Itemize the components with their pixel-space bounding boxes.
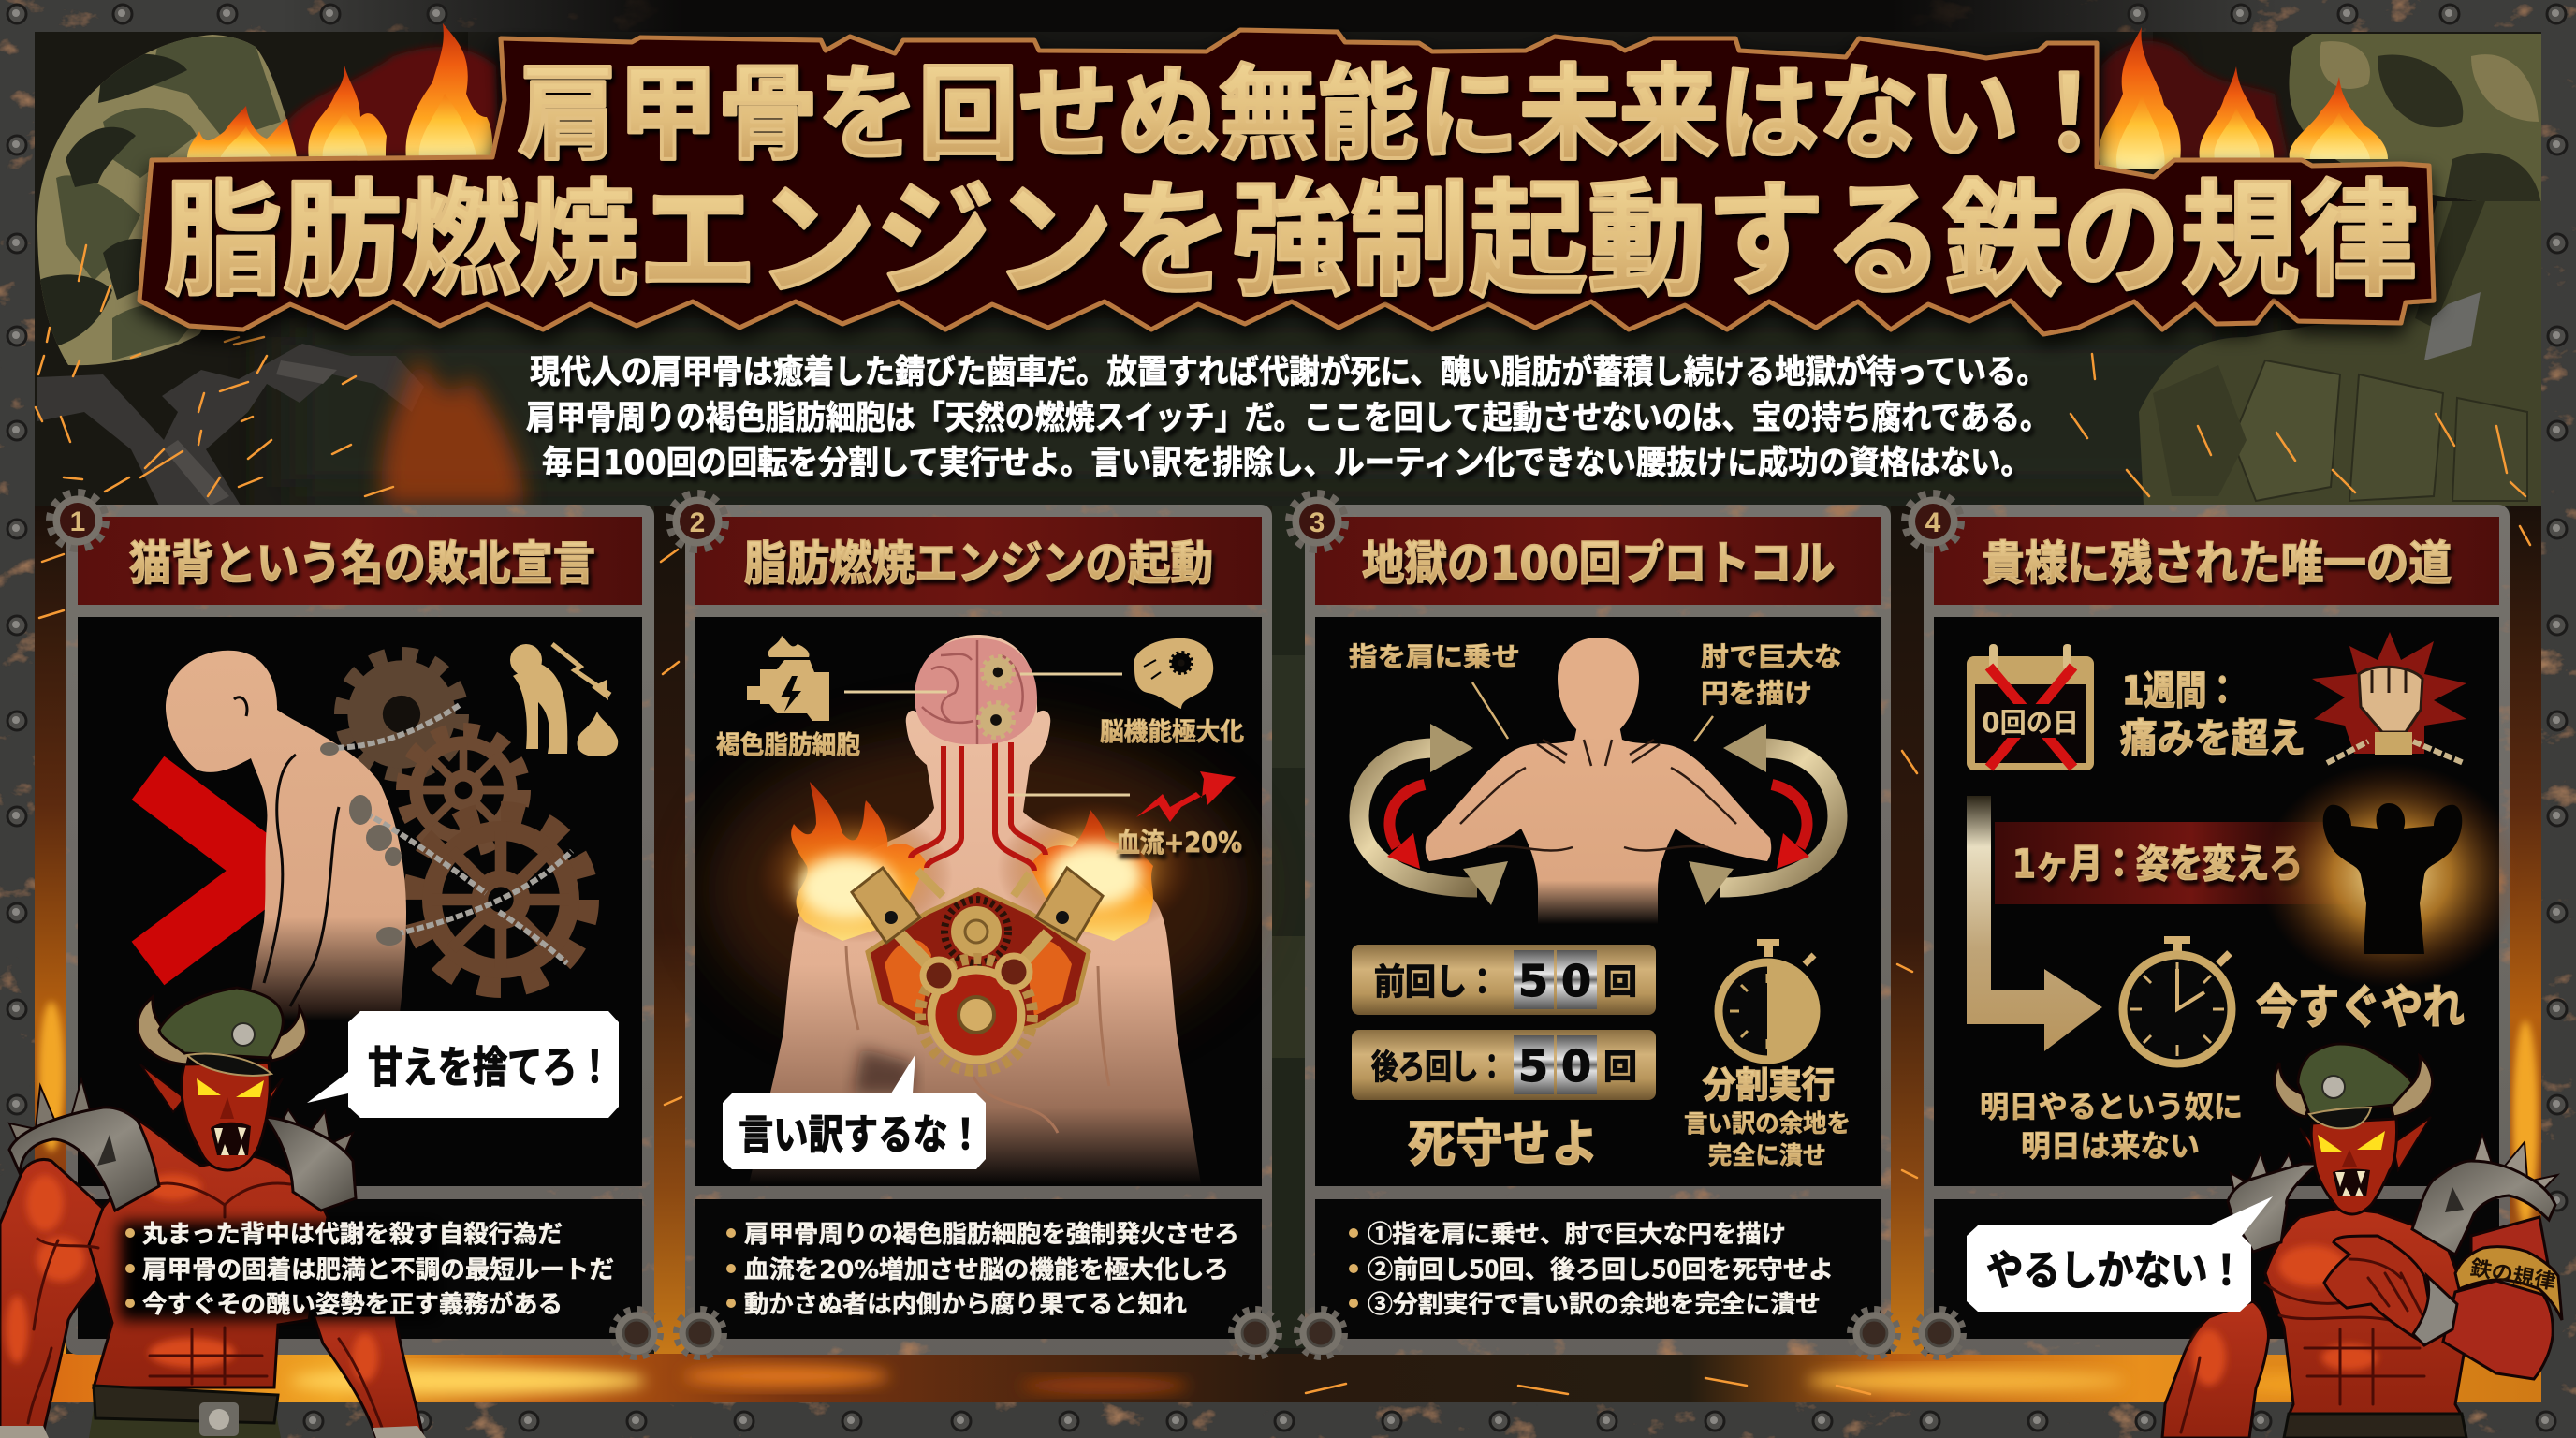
torso bbox=[89, 1116, 328, 1387]
panel 2 bullets: 肩甲骨周りの褐色脂肪細胞を強制発火させろ bbox=[744, 1220, 1239, 1248]
panel 4 image area bbox=[1934, 617, 2499, 1186]
panel 2 bullets bbox=[726, 1220, 1239, 1318]
title line 2: 脂肪燃焼エンジンを強制起動する鉄の規律 bbox=[164, 171, 2418, 311]
label: hold to the death: 死守せよ bbox=[1408, 1116, 1599, 1172]
label: split execution: 言い訳の余地を bbox=[1684, 1109, 1851, 1137]
panel 2 speech bubble bbox=[723, 1054, 986, 1169]
panel 1 speech bubble bbox=[307, 1011, 619, 1118]
arrow to shoulder bbox=[1472, 682, 1508, 739]
label: split execution: 分割実行 bbox=[1703, 1066, 1835, 1106]
bubble text: やるしかない！ bbox=[1986, 1248, 2245, 1294]
panel 1 number badge: 1 bbox=[70, 506, 85, 537]
muscle highlights bbox=[6, 1174, 378, 1382]
panel 1: frame and header bbox=[50, 492, 661, 1357]
panel 4 red header bbox=[1934, 517, 2499, 605]
panel 1 bullets bbox=[120, 1220, 614, 1320]
panel 2 number badge bbox=[669, 493, 725, 550]
plate: backward 50: 5 bbox=[1518, 1041, 1548, 1092]
left circular arrow bbox=[1359, 724, 1508, 905]
bubble text: 甘えを捨てろ！ bbox=[368, 1043, 612, 1092]
forearm bbox=[2443, 1281, 2553, 1379]
intro text: 毎日100回の回転を分割して実行せよ。言い訳を排除し、ルーティン化できない腰抜けに成功の資格はない。 bbox=[542, 445, 2031, 482]
panel 4 bottom box bbox=[1934, 1199, 2499, 1339]
hands and chest lines bbox=[1460, 740, 1736, 851]
leader lines bbox=[844, 674, 1130, 795]
sparks bbox=[36, 245, 2530, 1394]
panel 2 metal frame bbox=[685, 505, 1272, 1355]
demon right bbox=[2162, 1044, 2562, 1438]
horns bbox=[2275, 1056, 2433, 1117]
panel 3 metal frame bbox=[1305, 505, 1891, 1355]
panel 1 metal frame bbox=[66, 505, 654, 1355]
label: brown fat: 褐色脂肪細胞 bbox=[716, 731, 860, 759]
plate: backward 50: 回 bbox=[1603, 1048, 1637, 1086]
armband bbox=[2455, 1247, 2562, 1320]
muscle lines bbox=[28, 1183, 384, 1432]
panel 2 illustration: body with shoulder engine bbox=[707, 635, 1250, 1184]
panel 3 bullet box bbox=[1315, 1199, 1881, 1339]
panel 4 heading: 貴様に残された唯一の道 bbox=[1982, 537, 2452, 590]
icon: crossed-out calendar bbox=[1967, 644, 2094, 770]
panel 2 bullet box bbox=[695, 1199, 1262, 1339]
officer cap bbox=[159, 988, 283, 1076]
panel 3 number badge bbox=[1289, 493, 1345, 550]
label: one week: 痛みを超え bbox=[2120, 716, 2305, 760]
banner text: 1ヶ月：姿を変えろ bbox=[2012, 841, 2303, 887]
panel 1 red header bbox=[78, 517, 642, 605]
label: brain function: 脳機能極大化 bbox=[1100, 718, 1244, 746]
panel 3 bullets: ③分割実行で言い訳の余地を完全に潰せ bbox=[1368, 1285, 1821, 1320]
panel 3 corner gears bbox=[1296, 1309, 1898, 1357]
panel 4: frame and header bbox=[1905, 493, 2510, 1357]
plate: forward 50: 0 bbox=[1561, 956, 1591, 1006]
demon left bbox=[0, 988, 426, 1438]
plate: forward 50 bbox=[1352, 945, 1656, 1015]
gold progress path with arrow bbox=[1967, 796, 2102, 1051]
brain bbox=[915, 638, 1037, 744]
title bbox=[164, 57, 2418, 311]
torso bbox=[2265, 1208, 2471, 1416]
red vessels bbox=[911, 742, 1046, 871]
rust patches on skin bbox=[320, 742, 402, 946]
panel 3 heading: 地獄の100回プロトコル bbox=[1362, 536, 1835, 591]
dim background glow bbox=[707, 730, 1250, 1049]
banner: one month bbox=[1995, 822, 2352, 904]
hunched back figure bbox=[166, 651, 406, 1020]
panel 2 heading: 脂肪燃焼エンジンの起動 bbox=[744, 537, 1213, 590]
armor left shoulder bbox=[9, 1079, 159, 1211]
label: no tomorrow bbox=[1980, 1090, 2243, 1163]
label: draw huge circle bbox=[1701, 642, 1842, 708]
left arm with bicep bbox=[0, 1160, 110, 1438]
flames on shoulders bbox=[756, 782, 1193, 943]
panel 1 bullets: 肩甲骨の固着は肥満と不調の最短ルートだ bbox=[142, 1255, 614, 1284]
wristbands bbox=[0, 1426, 426, 1438]
label: no tomorrow: 明日は来ない bbox=[2021, 1129, 2200, 1163]
panel 4 speech bubble bbox=[1967, 1196, 2273, 1312]
plate: backward 50: 0 bbox=[1561, 1041, 1591, 1092]
belt bbox=[2284, 1414, 2466, 1438]
panel 3 bullets: ①指を肩に乗せ、肘で巨大な円を描け bbox=[1368, 1215, 1786, 1250]
icon: hunched posture and fat skull bbox=[510, 644, 618, 756]
helmet camo: top right bbox=[2290, 34, 2541, 201]
intro text: 肩甲骨周りの褐色脂肪細胞は「天然の燃焼スイッチ」だ。ここを回して起動させないのは、宝の持ち腐れである。 bbox=[526, 400, 2050, 436]
torso with arms bbox=[1426, 726, 1771, 924]
right arm (viewer right) bbox=[314, 1315, 423, 1438]
right circular arrow bbox=[1689, 724, 1837, 905]
head bbox=[2300, 1117, 2431, 1214]
rusty gears bbox=[343, 655, 587, 986]
helmet camo: top left bbox=[37, 35, 286, 365]
icon: red up arrow bbox=[1136, 771, 1236, 822]
panel 1 corner gear bbox=[612, 1309, 661, 1357]
tactical vest: right bbox=[2139, 201, 2541, 506]
icon: engine with flame bbox=[747, 636, 829, 721]
icon: crossed-out calendar: 0回の日 bbox=[1982, 707, 2079, 739]
panel 1 heading: 猫背という名の敗北宣言 bbox=[129, 537, 595, 590]
icon: fist breaking chains bbox=[2312, 632, 2466, 763]
icon: stopwatch bbox=[2123, 936, 2232, 1064]
panel 3 illustration: shoulder circles bbox=[1349, 638, 1842, 924]
label: draw huge circle: 円を描け bbox=[1701, 679, 1812, 708]
title line 1: 肩甲骨を回せぬ無能に未来はない！ bbox=[518, 57, 2119, 172]
back lines bbox=[234, 697, 339, 1006]
plate: forward 50: 前回し： bbox=[1374, 963, 1498, 1003]
arm separations bbox=[846, 946, 1109, 1133]
panel 3 image area bbox=[1315, 617, 1881, 1186]
intro text: 現代人の肩甲骨は癒着した錆びた歯車だ。放置すれば代謝が死に、醜い脂肪が蓄積し続ける地獄が待っている。 bbox=[530, 354, 2047, 390]
armor right shoulder bbox=[265, 1109, 356, 1211]
icon: brain gear bbox=[1134, 638, 1213, 709]
panel 2 number badge: 2 bbox=[690, 507, 705, 538]
panel 1 image area bbox=[78, 617, 642, 1186]
upper arm bbox=[2471, 1217, 2548, 1264]
finger lines bbox=[2349, 1259, 2422, 1315]
broken gear shards and fire glow: left bbox=[37, 344, 524, 506]
panel 1 bullets: 今すぐその醜い姿勢を正す義務がある bbox=[142, 1290, 563, 1318]
abs and pec lines bbox=[2181, 1283, 2424, 1432]
plate: forward 50: 5 bbox=[1518, 956, 1548, 1006]
label: no tomorrow: 明日やるという奴に bbox=[1980, 1090, 2243, 1123]
armor shoulder (viewer left) bbox=[2228, 1153, 2319, 1252]
label: one week bbox=[2120, 668, 2305, 760]
shaded wedge beside torso bbox=[854, 1049, 913, 1093]
panel 2 corner gears bbox=[676, 1309, 1280, 1357]
label: do it now: 今すぐやれ bbox=[2256, 981, 2465, 1034]
label: one week: 1週間： bbox=[2122, 668, 2238, 713]
panel 3 bullets bbox=[1349, 1215, 1834, 1320]
pointing hand bbox=[2324, 1236, 2434, 1342]
icon: glowing muscle silhouette bbox=[2261, 763, 2523, 988]
panel 1 bullet box bbox=[78, 1199, 642, 1339]
panel 3 bullets: ②前回し50回、後ろ回し50回を死守せよ bbox=[1368, 1251, 1834, 1285]
officer cap bbox=[2298, 1044, 2412, 1128]
red X bbox=[148, 778, 309, 963]
title flames: left bbox=[187, 23, 499, 159]
panel 2 image area bbox=[695, 617, 1262, 1186]
label: split execution bbox=[1684, 1066, 1851, 1169]
panel 1 number badge bbox=[50, 492, 106, 549]
panel 1 illustration: X, back figure, gears bbox=[148, 644, 618, 1020]
panel 4 metal frame bbox=[1924, 505, 2510, 1355]
head bbox=[1558, 638, 1639, 740]
left arm (viewer left) bbox=[2162, 1301, 2268, 1438]
intro text bbox=[526, 354, 2050, 482]
head bbox=[140, 1063, 283, 1170]
plate: backward 50: 後ろ回し： bbox=[1371, 1048, 1505, 1086]
label: blood flow: 血流+20% bbox=[1116, 827, 1242, 858]
label: split execution: 完全に潰せ bbox=[1708, 1141, 1826, 1169]
pants and belt bbox=[89, 1386, 281, 1438]
title plaque bbox=[139, 30, 2434, 334]
panel 4 number badge: 4 bbox=[1925, 507, 1941, 538]
bubble text: 言い訳するな！ bbox=[739, 1112, 983, 1158]
panel 2 red header bbox=[695, 517, 1262, 605]
wristband bbox=[2413, 1276, 2457, 1345]
panel 3: frame and header bbox=[1289, 493, 1898, 1357]
plate: forward 50: 回 bbox=[1603, 962, 1637, 1001]
armor shoulder (viewer right) bbox=[2412, 1135, 2557, 1255]
background: fire band along bottom bbox=[35, 1354, 2541, 1404]
head and back body bbox=[749, 635, 1201, 1184]
label: fingers on shoulders: 指を肩に乗せ bbox=[1349, 642, 1520, 671]
panel 3 red header bbox=[1315, 517, 1881, 605]
title flames: right bbox=[2099, 27, 2388, 169]
muscle highlights bbox=[2192, 1245, 2509, 1386]
panel 1 bullets: 丸まった背中は代謝を殺す自殺行為だ bbox=[142, 1220, 563, 1248]
plate: backward 50 bbox=[1352, 1030, 1656, 1100]
panel 2 bullets: 動かさぬ者は内側から腐り果てると知れ bbox=[744, 1290, 1187, 1318]
horns bbox=[138, 997, 306, 1064]
panel 4 number badge bbox=[1905, 493, 1961, 550]
engine bbox=[852, 868, 1103, 1071]
arrow to elbow bbox=[1694, 716, 1713, 741]
label: draw huge circle: 肘で巨大な bbox=[1701, 642, 1842, 671]
panel 2 bullets: 血流を20%増加させ脳の機能を極大化しろ bbox=[744, 1256, 1229, 1284]
icon: half stopwatch bbox=[1719, 939, 1816, 1060]
chains bbox=[327, 705, 572, 963]
panel 2: frame and header bbox=[669, 493, 1280, 1357]
panel 4 corner gear bbox=[1915, 1309, 1964, 1357]
armband text: 鉄の規律 bbox=[2468, 1255, 2557, 1294]
panel 3 number badge: 3 bbox=[1310, 507, 1325, 538]
